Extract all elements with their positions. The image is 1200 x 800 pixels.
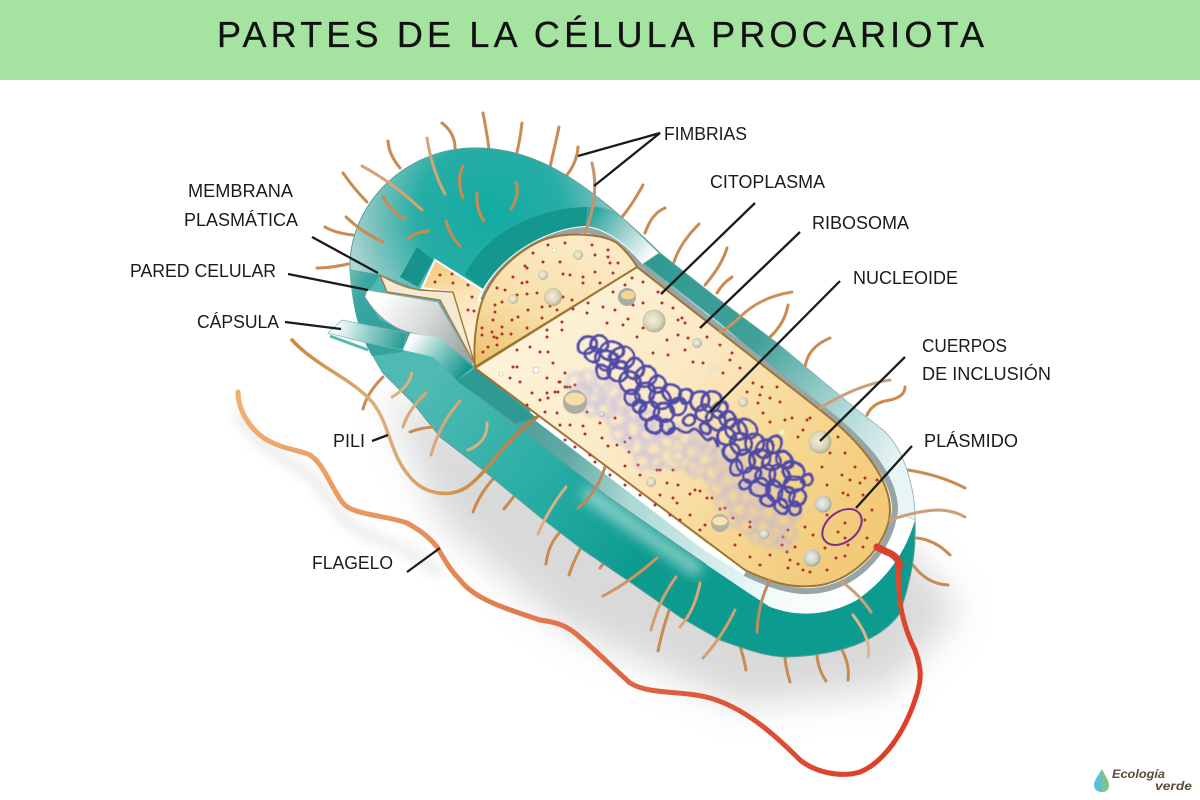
ribosomes bbox=[435, 243, 877, 572]
dark teal cut of the wall bbox=[400, 247, 433, 287]
flagellum bbox=[238, 392, 920, 774]
dark arch of the wall bbox=[465, 207, 590, 290]
label: cuerpos de inclusión: DE INCLUSIÓN bbox=[922, 363, 1051, 384]
soft shadow under the cell bbox=[385, 390, 960, 705]
capsule flap right bbox=[403, 333, 473, 380]
label: pili: PILI bbox=[333, 431, 365, 451]
title: PARTES DE LA CÉLULA PROCARIOTA bbox=[217, 14, 984, 55]
left capsule band bbox=[350, 270, 412, 356]
nucleoid ghost shadow bbox=[567, 371, 800, 550]
label: membrana plasmática: PLASMÁTICA bbox=[184, 210, 298, 230]
light arch of the wall bbox=[586, 207, 659, 266]
label: cuerpos de inclusión bbox=[922, 336, 1051, 384]
logo: Ecología Verde bbox=[1094, 767, 1192, 793]
icon: leaf drop bbox=[1094, 769, 1109, 792]
label: ribosoma: RIBOSOMA bbox=[812, 213, 909, 233]
label: membrana plasmática bbox=[184, 181, 298, 230]
thin line on wall band bbox=[457, 380, 707, 565]
membrane cut-away piece bbox=[422, 260, 486, 362]
capsule flap lower edge bbox=[330, 336, 368, 350]
soft light fade below wall band bbox=[590, 495, 695, 568]
label: fimbrias: FIMBRIAS bbox=[664, 124, 747, 144]
plasmid bbox=[815, 502, 869, 552]
pili bbox=[292, 340, 537, 493]
light wall band and end cap around cytoplasm bbox=[457, 263, 915, 614]
white gap under arch bbox=[481, 230, 640, 302]
flagellum shadow bbox=[238, 410, 440, 575]
fimbriae on the cell bbox=[346, 138, 965, 658]
label: membrana plasmática: MEMBRANA bbox=[188, 181, 293, 201]
label: nucleoide: NUCLEOIDE bbox=[853, 268, 958, 288]
label: cuerpos de inclusión: CUERPOS bbox=[922, 336, 1007, 356]
logo: Ecología Verde: verde bbox=[1155, 779, 1192, 793]
label: plásmido: PLÁSMIDO bbox=[924, 431, 1018, 451]
plasma membrane gray line bbox=[483, 230, 895, 591]
label: pared celular: PARED CELULAR bbox=[130, 261, 276, 281]
diagram: prokaryotic cell bbox=[238, 113, 965, 774]
labels bbox=[130, 124, 1051, 573]
outer fimbriae behind the body bbox=[317, 113, 965, 682]
gray wall flap bbox=[365, 290, 473, 363]
capsule body silhouette bbox=[350, 148, 915, 657]
capsule flap bbox=[328, 320, 407, 350]
inclusion bodies bbox=[499, 248, 832, 566]
title banner bbox=[0, 0, 1200, 80]
logo: Ecología Verde: Ecología bbox=[1112, 767, 1165, 781]
label: cápsula: CÁPSULA bbox=[197, 312, 279, 332]
label: citoplasma: CITOPLASMA bbox=[710, 172, 825, 192]
main cytoplasm face bbox=[475, 267, 890, 586]
top rim band of the wall bbox=[643, 253, 915, 520]
upper cytoplasm section bbox=[474, 235, 637, 367]
dome of the capsule bbox=[350, 148, 660, 292]
cell wall flap bbox=[380, 275, 475, 365]
leader lines bbox=[285, 133, 912, 572]
white strip along cytoplasm edge bbox=[530, 412, 760, 580]
label: flagelo: FLAGELO bbox=[312, 553, 393, 573]
flagellum base bbox=[877, 547, 900, 566]
nucleoid bbox=[579, 335, 812, 514]
slab start dark teal at the cut bbox=[457, 369, 537, 423]
